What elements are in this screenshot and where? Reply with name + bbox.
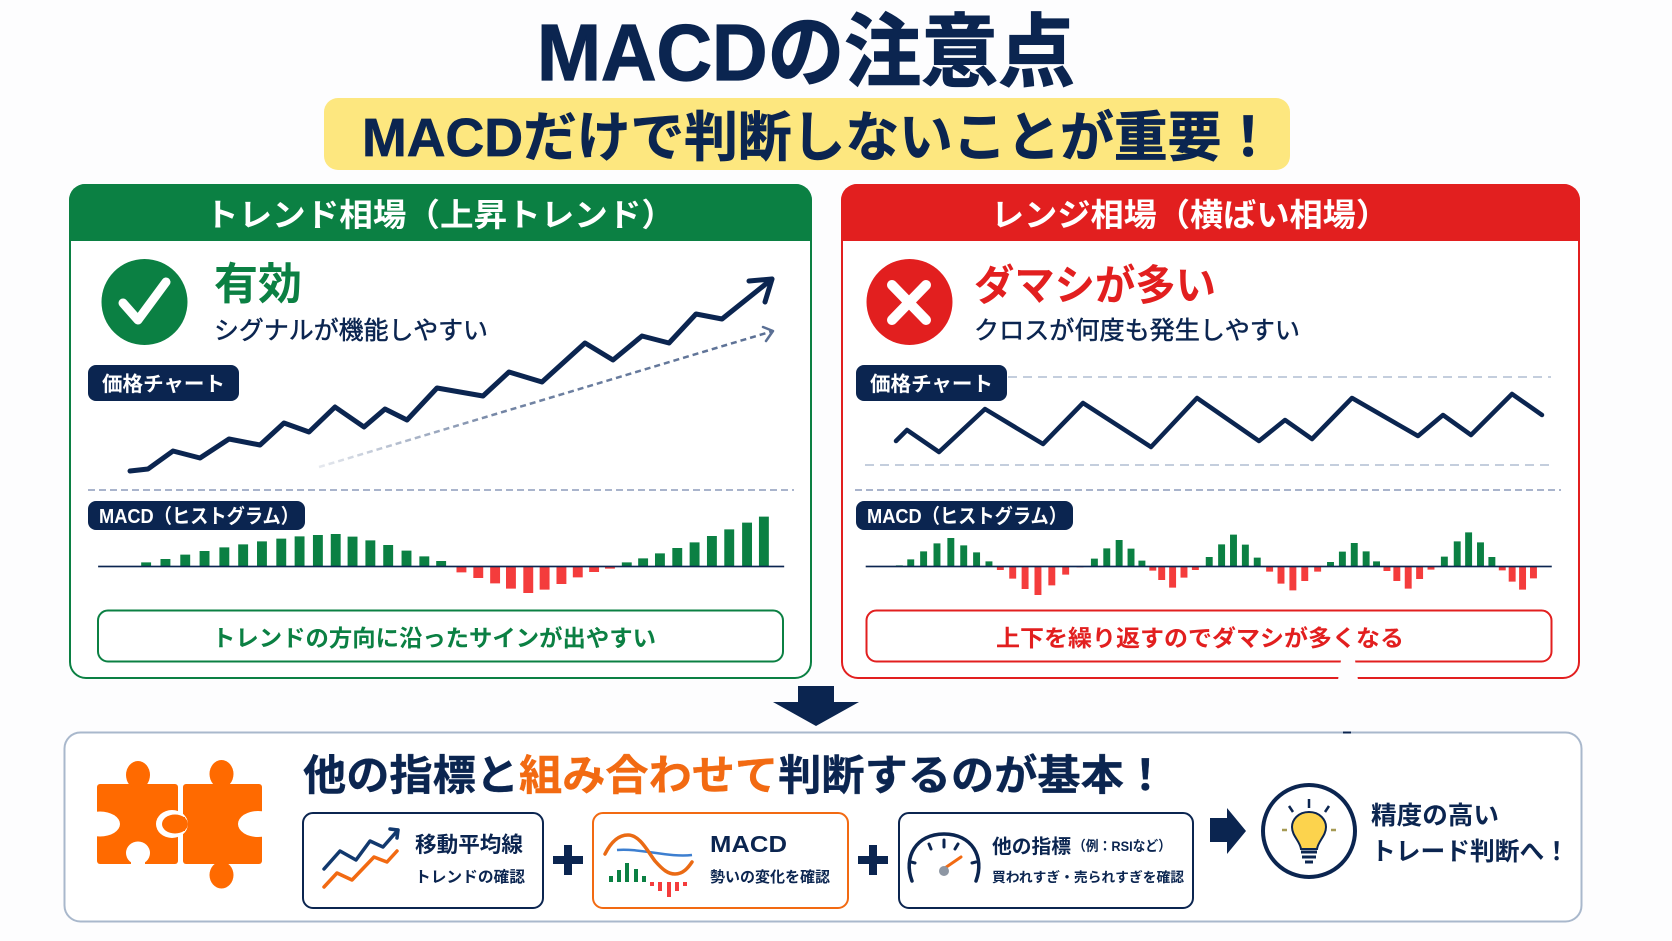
histogram: range market — [866, 532, 1552, 595]
card: moving average — [303, 813, 543, 908]
verdict: effective: 有効 — [214, 260, 302, 309]
card: moving average: トレンドの確認 — [415, 867, 525, 886]
card: MACD: MACD — [710, 831, 787, 857]
panel header: trend market — [69, 184, 812, 241]
verdict description: クロスが何度も発生しやすい — [974, 317, 1300, 345]
card: MACD: 勢いの変化を確認 — [710, 868, 830, 886]
icon: check mark — [102, 259, 188, 345]
conclusion text: 精度の高い — [1371, 802, 1499, 830]
card: moving average: 移動平均線 — [415, 833, 523, 857]
badge: MACD histogram: MACD（ヒストグラム） — [867, 504, 1067, 528]
heading: combine: 他の指標と組み合わせて判断するのが基本！ — [303, 752, 1167, 799]
badge: MACD histogram — [88, 501, 305, 530]
verdict description: シグナルが機能しやすい — [214, 317, 488, 345]
subtitle banner: MACDだけで判断しないことが重要！ — [362, 108, 1275, 168]
arrow: down — [773, 686, 859, 726]
panel header: trend market: トレンド相場（上昇トレンド） — [205, 197, 675, 233]
panel: combine indicators — [64, 732, 1582, 922]
conclusion text — [1371, 802, 1569, 866]
panel: range market — [841, 184, 1580, 680]
badge: MACD histogram: MACD（ヒストグラム） — [99, 504, 299, 528]
title: MACDの注意点 — [537, 8, 1075, 97]
card: other indicators — [899, 813, 1193, 908]
card: MACD — [593, 813, 848, 908]
plus — [858, 845, 888, 875]
price line rising — [130, 279, 772, 471]
range boundary lines — [865, 377, 1551, 465]
badge: price chart: 価格チャート — [102, 373, 225, 396]
arrow: right — [1210, 808, 1246, 854]
card: other indicators: 他の指標 — [992, 836, 1071, 858]
callout: trend conclusion: トレンドの方向に沿ったサインが出やすい — [212, 625, 656, 651]
panel: trend market — [69, 184, 812, 678]
callout: trend conclusion — [98, 610, 783, 662]
icon: moving average lines — [324, 829, 398, 887]
icon: cross mark — [866, 259, 952, 345]
plus — [553, 845, 583, 875]
icon: MACD mini chart — [605, 835, 692, 897]
panel header: range market: レンジ相場（横ばい相場） — [991, 197, 1389, 233]
conclusion text: トレード判断へ！ — [1371, 838, 1569, 866]
histogram: trend market — [98, 517, 784, 593]
icon: light bulb — [1263, 785, 1355, 877]
panel header: range market — [841, 184, 1580, 241]
badge: price chart — [856, 365, 1007, 401]
icon: gauge — [909, 834, 979, 881]
badge: price chart: 価格チャート — [870, 373, 993, 396]
icon: puzzle pieces — [80, 760, 278, 888]
badge: price chart — [88, 365, 239, 401]
badge: MACD histogram — [856, 501, 1073, 530]
card: other indicators: 買われすぎ・売られすぎを確認 — [992, 869, 1185, 885]
callout: range conclusion — [866, 610, 1552, 662]
trend dashed line — [319, 327, 773, 467]
verdict: many false signals: ダマシが多い — [974, 262, 1216, 309]
price line sideways — [896, 394, 1542, 452]
callout: range conclusion: 上下を繰り返すのでダマシが多くなる — [996, 625, 1404, 651]
card: other indicators: （例：RSIなど） — [1073, 838, 1171, 854]
